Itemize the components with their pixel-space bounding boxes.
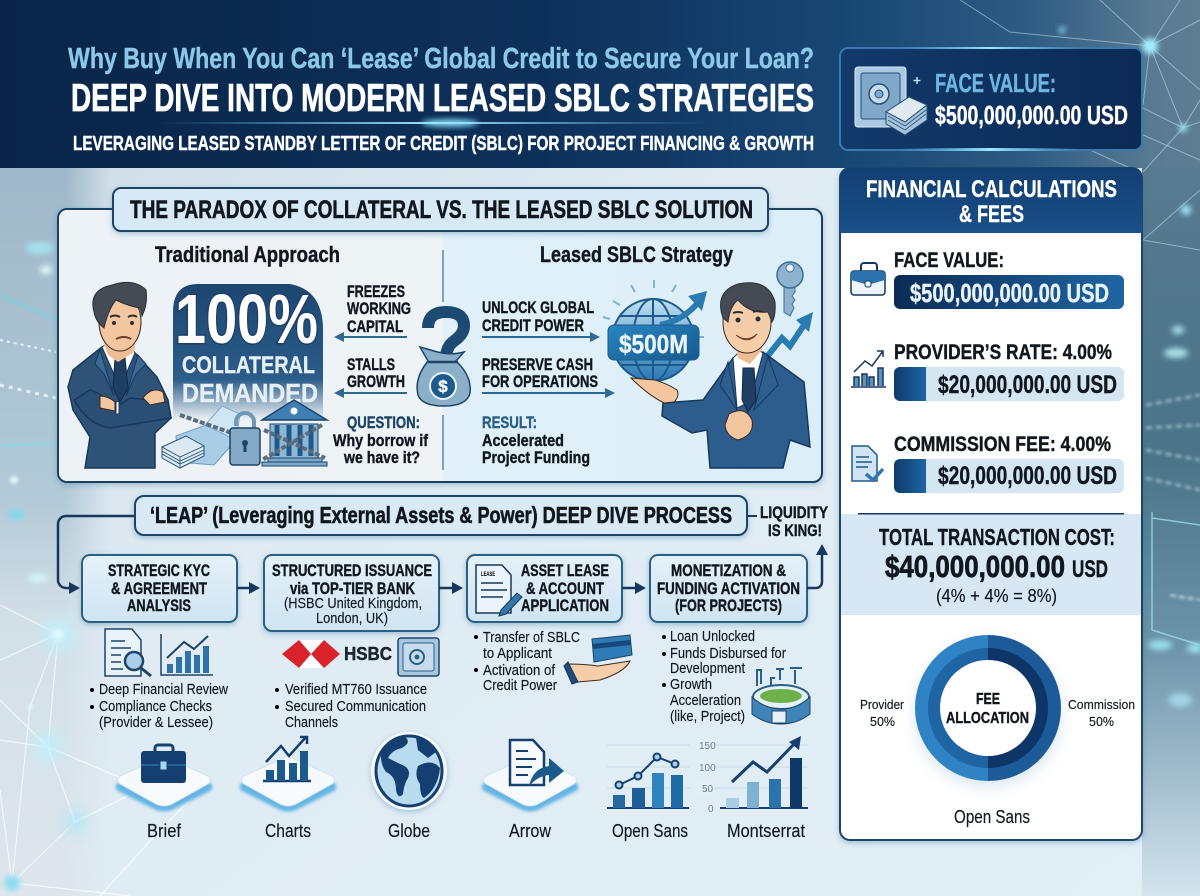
legend: commission share: Commission [1068,697,1135,712]
icon: brief [116,745,212,841]
text: result [482,413,590,467]
illustration: confident businessman [631,283,810,468]
step 1 box: STRATEGIC KYC [108,561,210,580]
arrow: preserve [482,392,613,394]
glow divider [160,120,710,126]
text: stalls growth: GROWTH [347,372,405,391]
text: question: we have it? [343,448,420,467]
text: preserve cash: FOR OPERATIONS [482,372,598,391]
text: step 4 bullets: Acceleration [670,692,741,709]
step 2 box: London, UK) [316,610,388,627]
title question: Why Buy When You Can ‘Lease’ Global Credit to Secure Your Loan? [68,43,814,75]
icon: growth chart [851,351,886,387]
row: provider rate: PROVIDER’S RATE: 4.00% [894,341,1112,364]
text: step 1 bullets: Deep Financial Review [99,681,228,698]
donut chart: fee allocation: ALLOCATION [946,710,1029,727]
icon: hand holding card [564,635,632,684]
text: step 1 bullets: (Provider & Lessee) [99,714,213,731]
arrow: stalls [336,392,407,394]
panel heading [113,188,768,231]
illustration: worried businessman [68,282,171,468]
text: preserve cash: PRESERVE CASH [482,355,593,374]
total transaction cost: (4% + 4% = 8%) [936,586,1057,606]
icon: rising arrow [766,312,813,358]
row: commission fee [894,433,1124,493]
arrow: step 2 to 3 [439,587,461,589]
step 4 box: FUNDING ACTIVATION [657,579,800,598]
icon: stadium [752,668,810,724]
icon: globe [371,732,447,841]
face value amount: $500,000,000.00 USD [935,100,1128,130]
text: preserve cash [482,355,598,391]
text: result: Accelerated [482,431,564,450]
process heading: ‘LEAP’ (Leveraging External Assets & Power) DEEP DIVE PROCESS [150,502,732,528]
legend: commission share [1068,697,1135,729]
text: result: RESULT: [482,413,537,432]
chart: open sans [607,745,690,841]
text: freezes working capital: WORKING [347,299,411,318]
step 3 box [467,555,622,622]
header banner [0,0,1200,250]
face value card [840,47,1142,151]
text: freezes working capital [347,282,411,336]
panel: paradox of collateral [58,188,822,482]
icon: globe with 500M badge [603,280,707,381]
step 2 box: STRUCTURED ISSUANCE [272,561,432,580]
chart: montserrat: 100 [699,763,716,774]
donut chart: fee allocation: FEE [976,691,1000,708]
section divider [442,250,444,470]
row: commission fee: COMMISSION FEE: 4.00% [894,433,1111,456]
step 2 box [264,555,439,631]
text: step 4 bullets: (like, Project) [670,708,745,725]
step 4 box [650,555,807,622]
legend: commission share: 50% [1089,714,1114,729]
text: step 2 bullets: Secured Communication [285,698,426,715]
icon: arrow: Arrow [509,821,552,841]
chart: montserrat: 150 [699,741,716,752]
text: step 2 bullets: Verified MT760 Issuance [285,681,427,698]
row: face value: FACE VALUE: [894,249,1004,272]
total transaction cost: $40,000,000.00 [885,549,1065,584]
callout: liquidity is king: IS KING! [768,521,822,540]
panel heading: FINANCIAL CALCULATIONS [866,176,1117,203]
chart: open sans: Open Sans [612,821,688,841]
subtitle: LEVERAGING LEASED STANDBY LETTER OF CREDIT (SBLC) FOR PROJECT FINANCING & GROWTH [73,133,814,155]
callout: 100 percent collateral [173,280,323,420]
heading: traditional: Traditional Approach [155,242,340,267]
icon: charts: Charts [265,821,311,841]
donut chart: fee allocation [915,635,1061,786]
step 4 box: (FOR PROJECTS) [675,596,782,615]
icon: brief: Brief [147,821,182,841]
text: step 4 bullets: Loan Unlocked [670,628,755,645]
text: step 4 bullets: Funds Disbursed for [670,645,786,662]
step 1 box: & AGREEMENT [111,579,207,598]
text: step 3 bullets [474,629,580,694]
step 3 box: APPLICATION [521,596,609,615]
icon: globe: Globe [388,821,430,841]
text: freezes working capital: FREEZES [347,282,405,301]
callout: 100 percent collateral: 100% [175,280,318,358]
callout: liquidity is king [760,503,829,540]
step 3 box: & ACCOUNT [526,579,604,598]
row: face value: $500,000,000.00 USD [910,278,1109,308]
step 3 box: ASSET LEASE [521,561,609,580]
chart: montserrat: Montserrat [727,821,805,841]
text: question [333,413,428,467]
text: step 3 bullets: Transfer of SBLC [483,629,580,646]
icon: charts [240,737,336,841]
icon: question mark and money bag: $ [438,377,448,396]
icon: lease document: LEASE [481,572,495,578]
text: step 2 bullets: Channels [285,714,338,731]
text: freezes working capital: CAPITAL [347,317,403,336]
row: commission fee: $20,000,000.00 USD [938,462,1117,490]
callout: 100 percent collateral: COLLATERAL [182,352,315,379]
heading: leased strategy: Leased SBLC Strategy [540,242,734,267]
text: step 4 bullets: Growth [670,676,712,693]
text: step 1 bullets [90,681,228,731]
icon: safe and cash [855,67,927,135]
arrow: unlock [482,336,598,338]
arrow: step 1 to 2 [237,587,258,589]
connector: title to step 1 [58,516,135,588]
text: unlock credit power [482,298,594,335]
icon: document review [105,629,151,676]
arrow: freezes [336,336,407,338]
legend: provider share: 50% [870,714,895,729]
callout: 100 percent collateral: DEMANDED [182,378,318,408]
total transaction cost: USD [1072,556,1108,583]
icon: lease document [476,565,522,616]
step 4 box: MONETIZATION & [671,561,786,580]
icon: checked document [852,446,883,481]
text: step 2 bullets [275,681,427,731]
text: unlock credit power: CREDIT POWER [482,316,584,335]
legend: provider share: Provider [860,697,905,712]
step 2 box: via TOP-TIER BANK [290,579,416,598]
caption: open sans: Open Sans [954,807,1030,827]
text: step 4 bullets: Development [670,660,746,677]
panel: financial calculations [840,168,1142,840]
text: step 3 bullets: Activation of [483,662,556,679]
text: step 3 bullets: Credit Power [483,677,557,694]
main heading: DEEP DIVE INTO MODERN LEASED SBLC STRATEGIES [71,77,814,120]
icon: frozen assets, lock and bank [162,400,327,468]
arrow: step 3 to 4 [622,587,644,589]
text: stalls growth: STALLS [347,355,395,374]
icon: key [777,262,803,316]
icon: bank safe [398,638,439,676]
process heading [135,496,747,535]
step 1 box [82,555,237,622]
icon: question mark and money bag [417,312,470,406]
total transaction cost: TOTAL TRANSACTION COST: [879,524,1115,550]
panel heading: & FEES [959,201,1024,228]
text: step 4 bullets [662,628,786,725]
icon: bar chart [161,634,213,675]
step 2 box: (HSBC United Kingdom, [284,595,422,612]
arrow: step 4 to liquidity [807,546,822,588]
chart: montserrat: 50 [702,784,714,795]
logo: hsbc [282,640,392,668]
row: provider rate: $20,000,000.00 USD [938,371,1117,399]
icon: briefcase [851,263,885,295]
legend: provider share [860,697,905,729]
text: question: QUESTION: [347,413,420,432]
icon: arrow [482,740,578,841]
panel heading: THE PARADOX OF COLLATERAL VS. THE LEASED SBLC SOLUTION [130,196,753,224]
text: unlock credit power: UNLOCK GLOBAL [482,298,594,317]
text: stalls growth [347,355,405,391]
icon row [116,732,808,841]
panel: leap process [58,496,829,731]
row: provider rate [894,341,1124,401]
total transaction cost [841,513,1141,615]
text: result: Project Funding [482,448,590,467]
panel heading [840,168,1142,233]
text: step 3 bullets: to Applicant [483,645,553,662]
chart: montserrat [698,736,808,841]
chart: montserrat: 0 [708,804,714,815]
icon: globe with 500M badge: $500M [619,329,688,359]
face value label: FACE VALUE: [935,68,1056,98]
row: face value [894,249,1124,309]
text: step 1 bullets: Compliance Checks [99,698,212,715]
logo: hsbc: HSBC [344,644,392,664]
callout: liquidity is king: LIQUIDITY [760,503,829,522]
step 1 box: ANALYSIS [127,596,191,615]
text: question: Why borrow if [333,431,428,450]
